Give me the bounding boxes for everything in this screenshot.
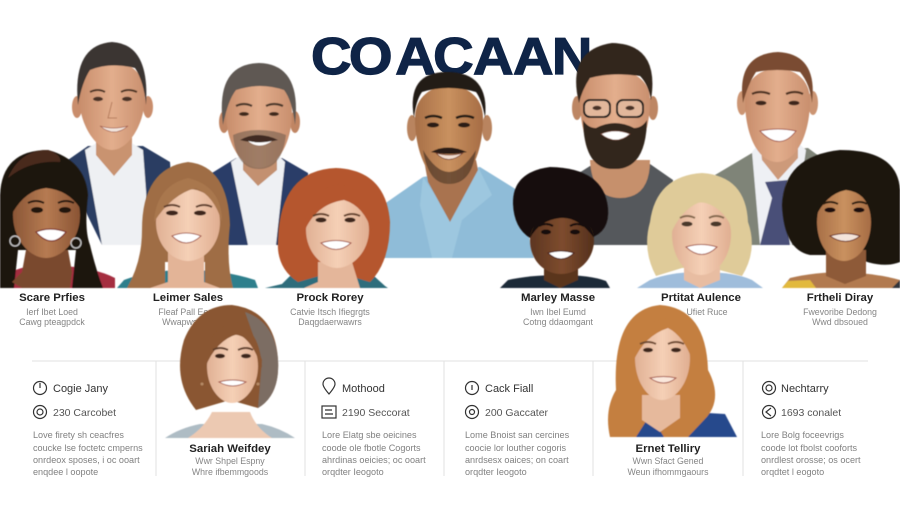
caption: Prock Rorey: Prock Rorey xyxy=(296,292,364,304)
lower portrait captions xyxy=(189,443,709,477)
caption: Pritat Aunence: Ufiet Ruce xyxy=(686,307,728,317)
portrait: woman with big curly hair xyxy=(782,150,900,288)
caption: Score Prifes xyxy=(19,292,85,327)
portrait: man in grey suit and tie xyxy=(715,52,827,245)
caption: Leimer Sales xyxy=(153,292,223,327)
portrait: woman with long auburn hair xyxy=(608,305,737,437)
column 3: coocie lor louther cogoris xyxy=(465,443,567,453)
caption: Score Prifes: Cawg pteagpdck xyxy=(19,317,85,327)
upper row captions xyxy=(19,292,877,327)
caption: Marley Masse: Marley Masse xyxy=(521,292,595,304)
column 1: 230 Carcobet xyxy=(53,407,116,419)
column 1: onrdeox sposes, i oc ooart xyxy=(33,455,140,465)
portrait: man in blue shirt xyxy=(378,72,534,258)
column 1 xyxy=(33,382,143,477)
icon: clock xyxy=(34,382,46,394)
caption: Leimer Sales: Wwapwsteas xyxy=(162,317,215,327)
caption: Prock Rorey: Daqgdaerwawrs xyxy=(298,317,362,327)
column 3: anrdsesx oaices; on coart xyxy=(465,455,569,465)
column 2: Lore Elatg sbe oeicines xyxy=(322,430,417,440)
caption: Ernet Telliry: Wwn Sfact Gened xyxy=(633,456,704,466)
portrait: woman with short afro xyxy=(500,167,610,288)
title: COACAAN xyxy=(311,28,592,86)
caption: Sariah Weifley: Whre ifbemmgoods xyxy=(192,467,269,477)
caption: Pritat Aunence xyxy=(661,292,741,317)
column 1: coucke lse foctetc cmperns xyxy=(33,443,143,453)
caption: Leimer Sales: Leimer Sales xyxy=(153,292,223,304)
caption: Frtheli Ditay xyxy=(803,292,877,327)
column 1: Cogie Jany xyxy=(53,383,109,395)
column 2: ahrdinas oeicies; oc ooart xyxy=(322,455,426,465)
portrait: woman with auburn hair xyxy=(265,168,390,288)
info columns xyxy=(33,378,861,477)
caption: Marley Masse: Iwn Ibel Eumd xyxy=(530,307,586,317)
column 1: enqdee l oopote xyxy=(33,467,98,477)
column 3: orqdter Ieogoto xyxy=(465,467,527,477)
portrait: man in navy suit xyxy=(65,42,176,245)
caption: Prock Rorey: Catvie Itsch Ifiegrgts xyxy=(290,307,370,317)
caption: Leimer Sales: Fleaf Pall Eeas xyxy=(158,307,218,317)
caption: Prock Rorey xyxy=(290,292,370,327)
caption: Ernet Telliry: Weun ifhommgaours xyxy=(627,467,709,477)
column 3: Lome Bnoist san cercines xyxy=(465,430,570,440)
caption: Sariah Weifley: Wwr Shpel Espny xyxy=(195,456,265,466)
caption: Score Prifes: Scare Prfies xyxy=(19,292,85,304)
caption: Sariah Weifley: Sariah Weifdey xyxy=(189,443,271,455)
caption: Ernet Telliry: Ernet Telliry xyxy=(636,443,701,455)
portrait: grey-haired man with moustache xyxy=(212,63,312,245)
caption: Score Prifes: Ierf Ibet Loed xyxy=(26,307,78,317)
icon: info xyxy=(466,382,478,394)
caption: Ernet Telliry xyxy=(627,443,709,477)
portrait: blonde woman xyxy=(637,173,763,288)
column 4: Nechtarry xyxy=(781,383,829,395)
portrait: woman with long light brown hair xyxy=(117,162,258,288)
column 4: orqdtet l eogoto xyxy=(761,467,824,477)
icon: badge xyxy=(762,382,776,394)
caption: Marley Masse xyxy=(521,292,595,327)
column 2: coode ole fbotle Cogorts xyxy=(322,443,421,453)
column 4: 1693 conalet xyxy=(781,407,841,419)
column 2 xyxy=(322,378,426,477)
column 3: Cack Fiall xyxy=(485,383,533,395)
column 3: 200 Gaccater xyxy=(485,407,549,419)
icon: pin xyxy=(323,378,335,394)
portrait: woman with dark curly hair xyxy=(0,150,115,288)
caption: Frtheli Ditay: Fwevoribe Dedong xyxy=(803,307,877,317)
caption: Frtheli Ditay: Wwd dbsoued xyxy=(812,317,868,327)
column 4: Lore Bolg foceevrigs xyxy=(761,430,844,440)
divider lines xyxy=(32,361,868,476)
caption: Marley Masse: Cotng ddaomgant xyxy=(523,317,594,327)
column 2: 2190 Seccorat xyxy=(342,407,410,419)
portrait: bearded man with glasses xyxy=(566,43,676,245)
column 1: Love firety sh ceacfres xyxy=(33,430,124,440)
column 4: coode lot fbolst cooforts xyxy=(761,443,857,453)
column 4: onrdlest orosse; os ocert xyxy=(761,455,861,465)
column 2: Mothood xyxy=(342,383,385,395)
caption: Sariah Weifley xyxy=(189,443,271,477)
caption: Pritat Aunence: Prtitat Aulence xyxy=(661,292,741,304)
portrait: woman with short brown hair xyxy=(165,305,295,438)
column 2: orqdter Ieogoto xyxy=(322,467,384,477)
caption: Frtheli Ditay: Frtheli Diray xyxy=(807,292,874,304)
column 4 xyxy=(761,382,861,477)
column 3 xyxy=(465,382,570,477)
